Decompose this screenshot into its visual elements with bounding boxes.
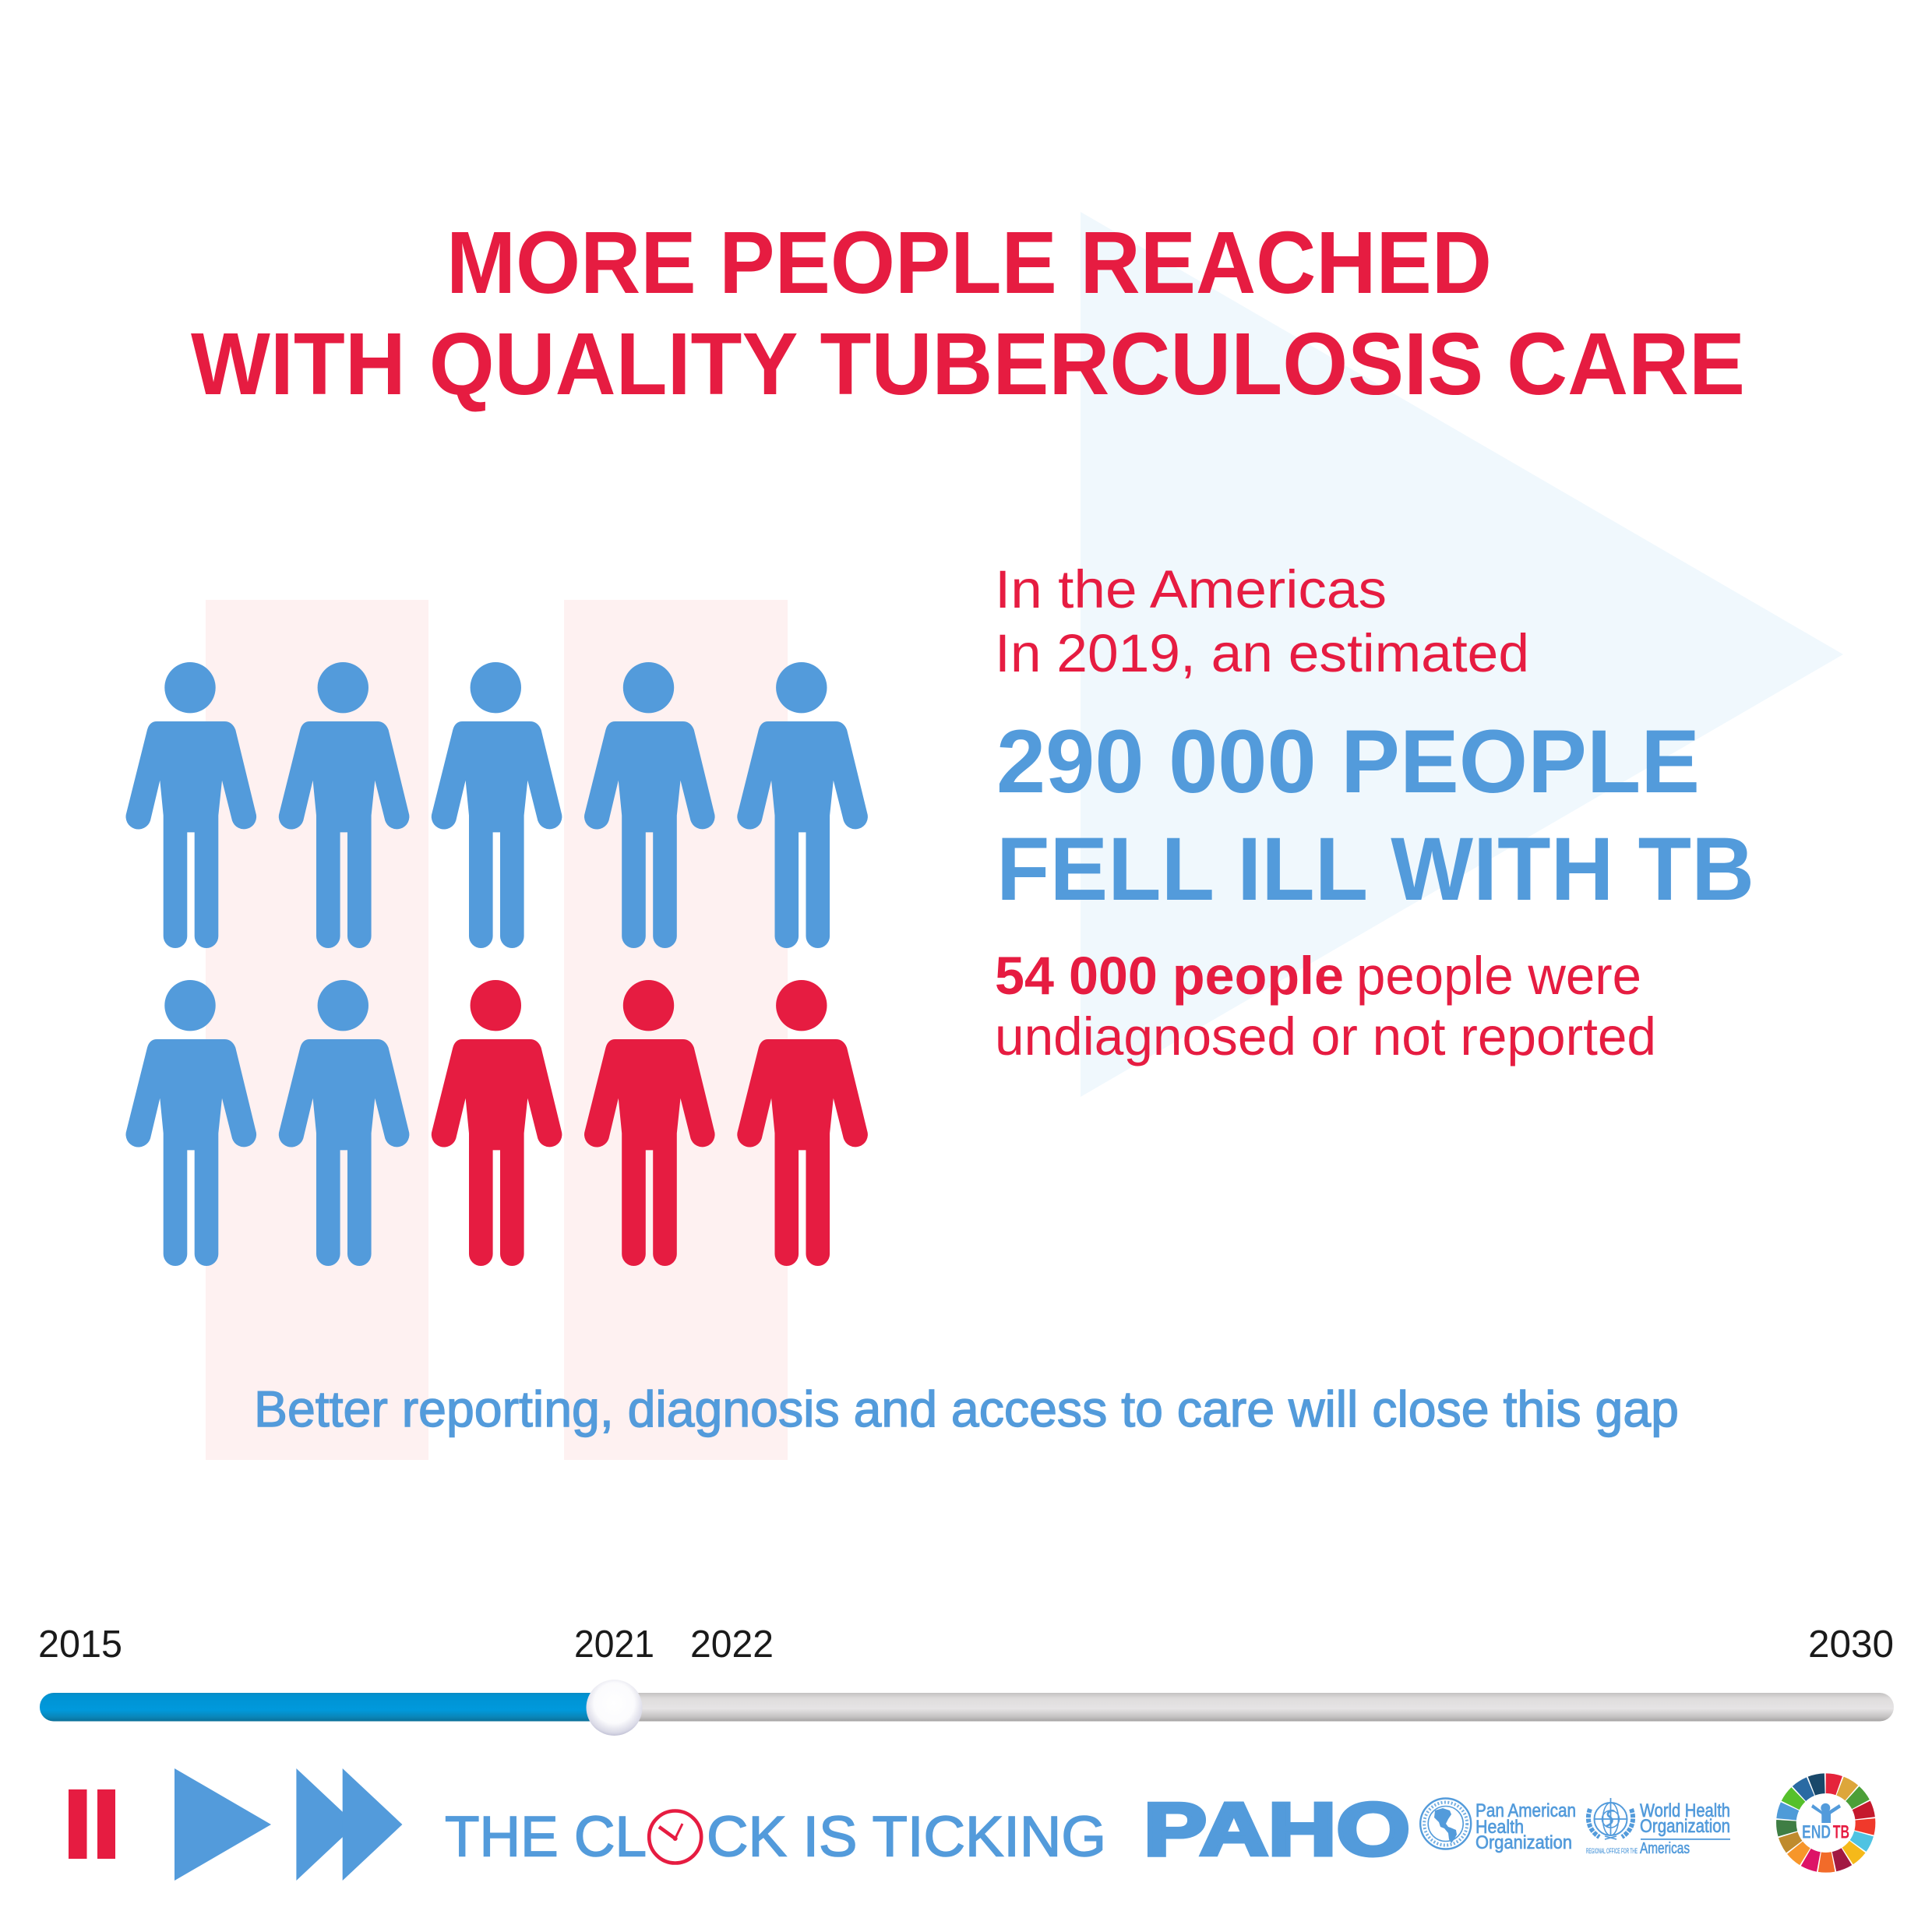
logo: PAHO emblem [1420,1798,1471,1849]
End TB label: TB [1833,1821,1849,1842]
logo: PAHO name: Organization [1475,1832,1572,1853]
person 7 [279,980,409,1266]
icon: play [175,1768,271,1881]
text: region and year intro: In 2019, an estimated [995,623,1529,683]
pink column left [206,600,428,1460]
text: region and year intro: In the Americas [995,559,1387,619]
text: region and year intro [995,559,1529,683]
slider knob [586,1680,642,1736]
text: undiagnosed statistic: people were [1356,946,1641,1006]
icon: fast forward [296,1768,402,1881]
logo: PAHO name: Health [1475,1817,1524,1838]
timeline year labels: 2022 [690,1624,774,1666]
headline statistic: FELL ILL WITH TB [996,820,1754,919]
pictogram: ten people, three in red [126,662,868,1266]
icon: pause [69,1789,115,1859]
text: undiagnosed statistic: undiagnosed or not reported [995,1007,1656,1066]
person 10, red [737,980,868,1266]
title: WITH QUALITY TUBERCULOSIS CARE [191,315,1745,413]
logo: WHO name: World Health [1640,1800,1730,1821]
logo: WHO name [1586,1800,1730,1857]
person 9, red [584,980,715,1266]
ring of 17 coloured segments [1770,1767,1881,1879]
timeline year labels [38,1624,1894,1666]
headline statistic [996,712,1754,919]
slogan: the clock is ticking: CK IS TICKING [707,1806,1106,1868]
person 2 [279,662,409,948]
logo: PAHO name [1475,1800,1576,1853]
person 4 [584,662,715,948]
slogan: the clock is ticking [445,1806,1106,1868]
person 3 [432,662,562,948]
person 5 [737,662,868,948]
logo: WHO emblem [1588,1798,1633,1839]
background play triangle [1081,212,1843,1097]
title: MORE PEOPLE REACHED [446,213,1492,312]
person 1 [126,662,256,948]
text: undiagnosed statistic: 54 000 people [995,946,1344,1006]
text: undiagnosed statistic [995,946,1656,1066]
timeline year labels: 2015 [38,1624,122,1666]
End TB label: END [1802,1821,1831,1842]
logo: WHO name: Americas [1640,1840,1690,1857]
slogan: the clock is ticking: THE CL [445,1806,647,1868]
pink column right [564,600,788,1460]
title [191,213,1745,413]
icon: person with raised arms [1811,1803,1841,1823]
logo: PAHO wordmark: PAHO [1144,1788,1410,1871]
closing message: Better reporting, diagnosis and access to care will close this gap [254,1380,1679,1437]
icon: clock [649,1810,701,1863]
logo: PAHO name: Pan American [1475,1800,1576,1821]
person 6 [126,980,256,1266]
timeline year labels: 2030 [1808,1624,1894,1666]
logo: WHO name: REGIONAL OFFICE FOR THE [1586,1847,1638,1855]
headline statistic: 290 000 PEOPLE [996,712,1700,812]
person 8, red [432,980,562,1266]
logo: WHO name: Organization [1640,1816,1730,1837]
timeline year labels: 2021 [574,1624,654,1666]
logo: End TB ring [1770,1767,1881,1879]
timeline slider [40,1680,1894,1736]
